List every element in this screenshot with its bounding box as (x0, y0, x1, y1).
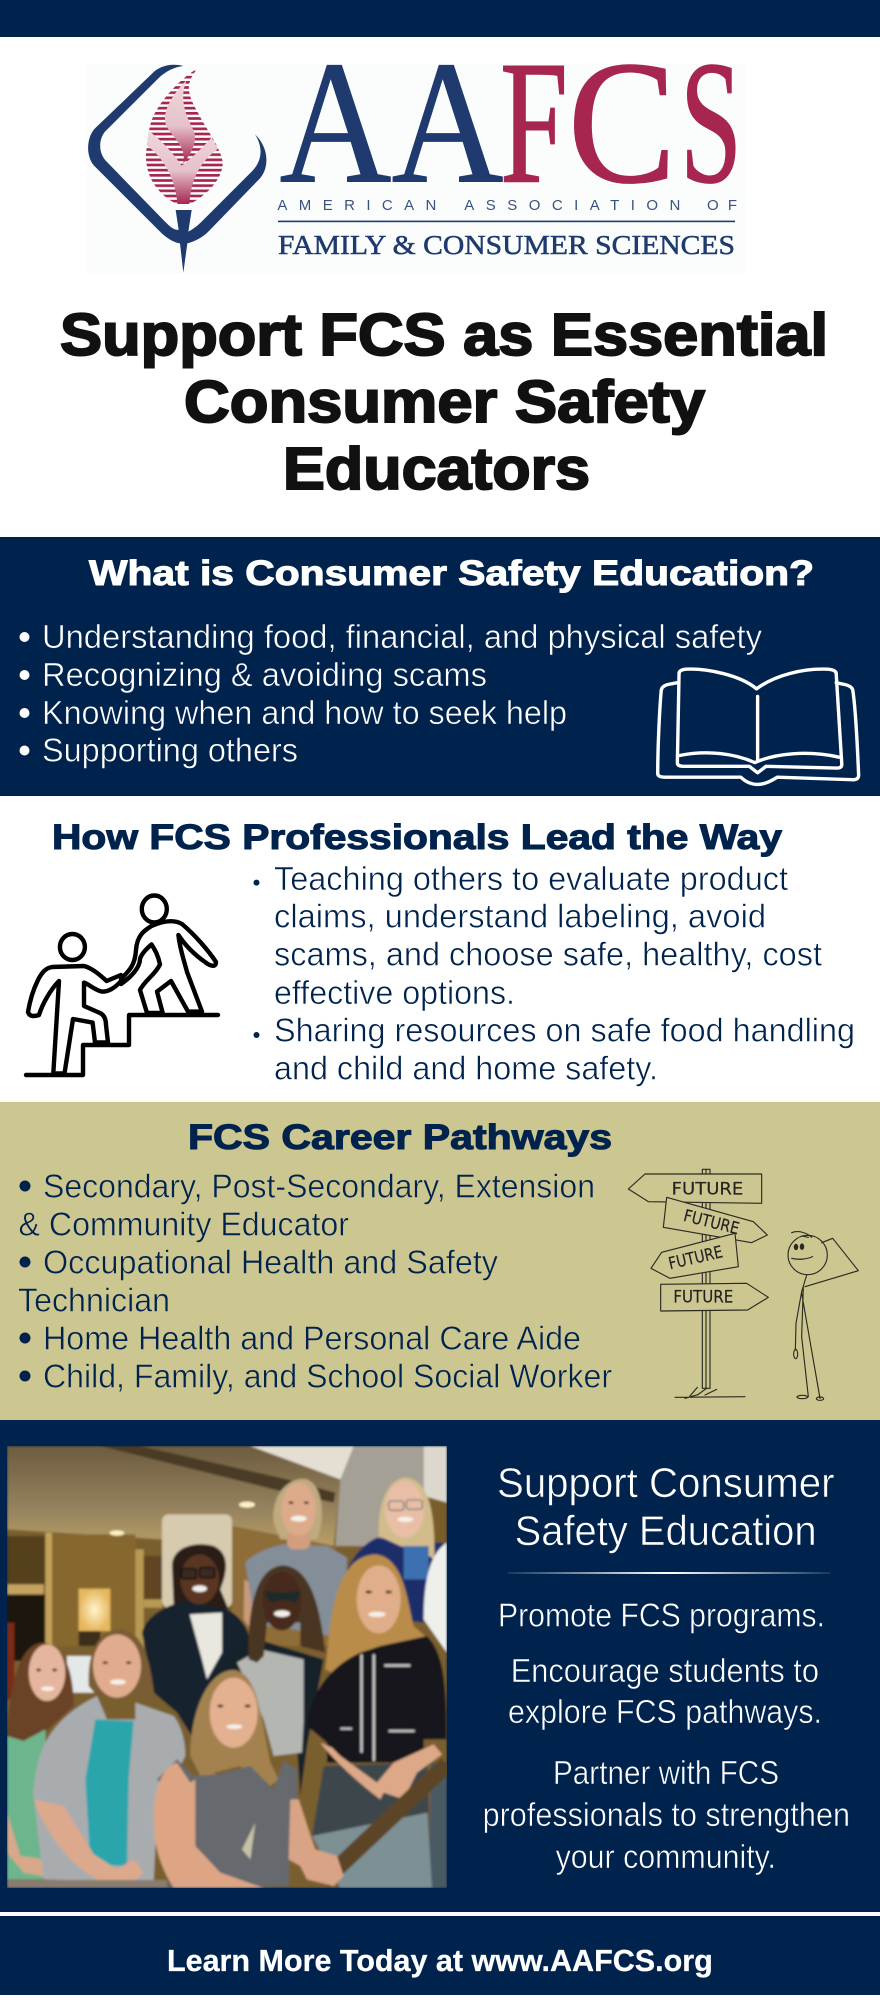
logo: AAFCS (88, 64, 736, 272)
title: Support FCS as Essential (60, 302, 828, 368)
bullet list: careers: Secondary, Post-Secondary, Extension (43, 1167, 595, 1204)
icon: signpost and stick figure: FUTURE (682, 1206, 741, 1238)
logo wordmark: FCS: C (568, 26, 676, 220)
bullet list: safety topics: Understanding food, financial, and physical safety (42, 618, 762, 655)
logo line: American Association of: AMERICAN (277, 197, 436, 214)
logo wordmark: FCS: F (500, 26, 568, 220)
text block: calls to action: explore FCS pathways. (508, 1693, 822, 1730)
icon: signpost and stick figure: FUTURE (672, 1179, 743, 1198)
heading: how FCS professionals lead the way: How FCS Professionals Lead the Way (52, 818, 783, 857)
bullet list: safety topics: Supporting others (42, 732, 298, 768)
bullet list: safety topics: Recognizing & avoiding scams (42, 656, 487, 693)
heading: support consumer safety education: Support Consumer (497, 1459, 835, 1506)
logo wordmark: AA: AA (280, 26, 504, 220)
heading: support consumer safety education: Safety Education (515, 1507, 817, 1554)
bullet list: careers: Technician (18, 1282, 170, 1319)
bullet list: careers (18, 1167, 612, 1394)
logo wordmark: FCS (500, 26, 742, 220)
text block: calls to action (483, 1596, 850, 1875)
icon: signpost and stick figure (628, 1169, 858, 1400)
logo line: American Association of (277, 197, 737, 214)
panel: what is consumer safety education (0, 537, 880, 796)
logo line: Family & Consumer Sciences: FAMILY & CONSUMER SCIENCES (278, 230, 735, 260)
panel: support consumer safety education (0, 1420, 880, 1912)
bullet list: what professionals do (254, 860, 855, 1086)
logo wordmark: FCS: S (680, 26, 742, 220)
icon: person helping another up stairs (26, 896, 218, 1075)
heading: FCS career pathways: FCS Career Pathways (188, 1118, 612, 1157)
text block: calls to action: professionals to strengthen (483, 1796, 850, 1833)
logo line: American Association of: ASSOCIATION (464, 197, 680, 214)
panel: how FCS professionals lead the way (26, 818, 855, 1086)
bullet list: what professionals do: claims, understand labeling, avoid (274, 898, 766, 934)
heading: support consumer safety education (497, 1459, 835, 1554)
bullet list: what professionals do: effective options. (274, 974, 515, 1011)
bullet list: what professionals do: scams, and choose safe, healthy, cost (274, 936, 822, 972)
bullet list: careers: Child, Family, and School Social Worker (43, 1357, 612, 1394)
bullet list: what professionals do: and child and home safety. (274, 1050, 658, 1086)
title (60, 302, 828, 502)
bullet list: careers: Occupational Health and Safety (43, 1243, 498, 1280)
bullet list: what professionals do: Teaching others to evaluate product (274, 860, 788, 897)
title: Consumer Safety (184, 369, 705, 435)
text block: calls to action: Partner with FCS (553, 1754, 779, 1791)
bullet list: what professionals do: Sharing resources on safe food handling (274, 1012, 855, 1048)
text block: calls to action: your community. (556, 1838, 776, 1875)
icon: open book (658, 669, 859, 784)
panel: FCS career pathways (0, 1102, 880, 1420)
footer: learn more: Learn More Today at www.AAFCS.org (167, 1943, 713, 1978)
bullet list: safety topics (20, 618, 762, 768)
icon: signpost and stick figure: FUTURE (667, 1242, 724, 1273)
icon: torch emblem (88, 65, 266, 273)
bullet list: careers: & Community Educator (18, 1206, 349, 1243)
heading: what is consumer safety education: What is Consumer Safety Education? (89, 554, 814, 593)
photo: group of FCS professionals (7, 1446, 447, 1888)
footer: learn more (0, 1916, 880, 1995)
text block: calls to action: Promote FCS programs. (498, 1596, 825, 1633)
logo line: American Association of: OF (707, 197, 737, 214)
top bar (0, 0, 880, 37)
icon: signpost and stick figure: FUTURE (673, 1287, 733, 1306)
bullet list: safety topics: Knowing when and how to seek help (42, 694, 567, 731)
bullet list: careers: Home Health and Personal Care Aide (43, 1319, 581, 1356)
text block: calls to action: Encourage students to (511, 1652, 819, 1689)
title: Educators (283, 436, 590, 502)
